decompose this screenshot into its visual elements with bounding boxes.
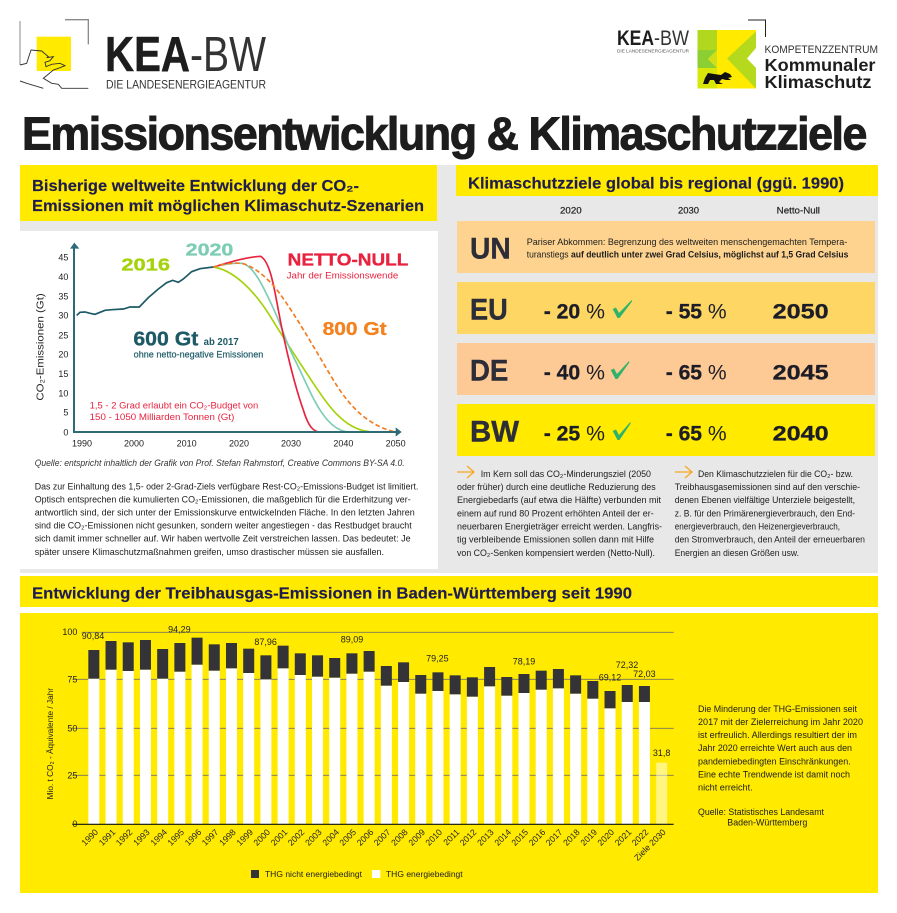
bar chart: THG emissions: 31,8 bbox=[653, 748, 670, 758]
panel: weltweite Entwicklung content bbox=[20, 231, 438, 569]
line chart: CO2 emissions scenarios: 40 bbox=[58, 272, 68, 282]
bar chart: THG emissions: 89,09 bbox=[341, 634, 363, 644]
icon: lion bbox=[703, 72, 732, 84]
line chart: CO2 emissions scenarios: 20 bbox=[58, 350, 68, 360]
row: UN bbox=[457, 221, 875, 273]
line chart: CO2 emissions scenarios: 1,5 - 2 Grad erlaubt ein CO₂-Budget von bbox=[90, 401, 258, 411]
line chart: CO2 emissions scenarios: ab 2017 bbox=[204, 337, 239, 348]
logo: KEA-BW bbox=[20, 20, 267, 92]
logo: KEA-BW: DIE LANDESENERGIEAGENTUR bbox=[106, 80, 266, 92]
bar chart: THG emissions: 2021 bbox=[613, 827, 634, 848]
title: Emissionsentwicklung & Klimaschutzziele bbox=[22, 108, 867, 160]
table: column headers: 2020 bbox=[560, 206, 582, 216]
text block: Minderung commentary: pandemiebedingten Einschränkungen. bbox=[698, 757, 851, 768]
bar chart: THG emissions: 1995 bbox=[165, 827, 186, 848]
bar chart: THG emissions: 2002 bbox=[286, 827, 307, 848]
row: EU: EU bbox=[470, 293, 508, 326]
row: EU: - 20 % bbox=[544, 299, 605, 323]
bar chart: THG emissions: 2018 bbox=[561, 827, 582, 848]
line chart: CO2 emissions scenarios: 600 Gt bbox=[133, 329, 199, 351]
bar chart: THG emissions: 2019 bbox=[578, 827, 599, 848]
bar chart: THG emissions: 94,29 bbox=[168, 624, 191, 634]
bar chart: THG emissions: 2015 bbox=[509, 827, 530, 848]
logo: Kompetenzzentrum Kommunaler Klimaschutz: Kommunaler bbox=[764, 55, 876, 75]
bar chart: THG emissions: 2022 bbox=[630, 827, 651, 848]
text block: Minderung commentary bbox=[698, 704, 863, 794]
bar chart: THG emissions: 2014 bbox=[492, 827, 513, 848]
line chart: CO2 emissions scenarios: ohne netto-negative Emissionen bbox=[134, 350, 263, 360]
line chart: CO2 emissions scenarios: NETTO-NULL bbox=[288, 250, 408, 270]
line chart: CO2 emissions scenarios: 35 bbox=[58, 291, 68, 301]
row: EU bbox=[457, 282, 875, 334]
row: DE: 2045 bbox=[773, 360, 829, 384]
logo: Kompetenzzentrum Kommunaler Klimaschutz: KEA bbox=[617, 27, 654, 50]
bar chart: THG emissions: 25 bbox=[67, 770, 77, 780]
line chart: CO2 emissions scenarios: 30 bbox=[58, 311, 68, 321]
line chart: CO2 emissions scenarios: 5 bbox=[63, 408, 68, 418]
icon: check mark bbox=[613, 422, 631, 440]
bar chart: THG emissions: 2011 bbox=[441, 827, 462, 847]
icon: check mark bbox=[613, 300, 632, 318]
text block: Minderung commentary: Die Minderung der THG-Emissionen seit bbox=[698, 704, 857, 715]
text block: Minderung commentary: Jahr 2020 erreichte Wert auch aus den bbox=[698, 743, 852, 754]
table: column headers: Netto-Null bbox=[777, 206, 820, 216]
bar chart: THG emissions: 1991 bbox=[97, 827, 118, 848]
text block: CO2-Minderungsziel: von CO₂-Senken kompensiert werden (Netto-Null). bbox=[457, 548, 655, 559]
text block: CO2-Minderungsziel: Energiebedarfs (auf etwa die Hälfte) verbunden mit bbox=[457, 495, 661, 506]
bar chart: THG emissions: 1997 bbox=[200, 827, 221, 848]
bar chart: THG emissions: 1999 bbox=[234, 827, 255, 848]
bar chart: THG emissions: 2020 bbox=[595, 827, 616, 848]
bar chart: THG emissions: 2003 bbox=[303, 827, 324, 848]
row: BW: BW bbox=[470, 416, 520, 449]
row: DE: DE bbox=[470, 355, 508, 388]
bar chart: THG emissions: Ziele 2030 bbox=[632, 827, 668, 863]
row: UN: turanstiegs auf deutlich unter zwei Grad Celsius, möglichst auf 1,5 Grad Celsius bbox=[527, 250, 848, 261]
line chart: CO2 emissions scenarios bbox=[35, 240, 408, 448]
bar chart: THG emissions: 2016 bbox=[527, 827, 548, 848]
panel: Klimaschutzziele heading: Klimaschutzziele global bis regional (ggü. 1990) bbox=[468, 176, 844, 192]
source note: Quelle: entspricht inhaltlich der Grafik von Prof. Stefan Rahmstorf, Creative Commons BY-SA 4.0. bbox=[35, 458, 405, 468]
source note: Quelle: Statistisches Landesamt bbox=[698, 807, 824, 818]
panel: Baden-Württemberg heading bbox=[20, 576, 878, 607]
text block: budget: Optisch entsprechen die kumulierten CO₂-Emissionen, die maßgeblich für die Erderhitzung ver- bbox=[35, 494, 411, 506]
source note bbox=[698, 807, 824, 829]
bar chart: THG emissions: 2010 bbox=[423, 827, 444, 848]
panel: weltweite Entwicklung heading: Emissionen mit möglichen Klimaschutz-Szenarien bbox=[32, 198, 424, 215]
text block: Unterziele: Energien an diesen Größen usw. bbox=[675, 548, 799, 559]
text block: CO2-Minderungsziel: oder früher) durch eine deutliche Reduzierung des bbox=[457, 482, 656, 493]
logo: Kompetenzzentrum Kommunaler Klimaschutz bbox=[617, 20, 878, 92]
bar chart: THG emissions: 90,84 bbox=[82, 631, 104, 641]
arrow bbox=[457, 466, 474, 478]
bar chart: THG emissions: 2007 bbox=[372, 827, 393, 848]
panel: weltweite Entwicklung heading bbox=[20, 165, 437, 221]
row: BW bbox=[457, 404, 875, 456]
table: column headers bbox=[560, 206, 820, 216]
logo: Kompetenzzentrum Kommunaler Klimaschutz: DIE LANDESENERGIEAGENTUR bbox=[617, 48, 690, 54]
line chart: CO2 emissions scenarios: 2016 bbox=[121, 255, 170, 275]
legend: THG energiebedingt bbox=[386, 869, 463, 879]
line chart: CO2 emissions scenarios: 2040 bbox=[333, 438, 353, 448]
bar chart: THG emissions: 2009 bbox=[406, 827, 427, 848]
bar chart: THG emissions: 1994 bbox=[148, 827, 169, 848]
bar chart: THG emissions: Mio. t CO₂ - Äquivalente / Jahr bbox=[45, 688, 55, 799]
text block: Unterziele: energieverbrauch, den Heizenergieverbrauch, bbox=[675, 522, 840, 532]
row: EU: - 55 % bbox=[666, 299, 727, 323]
row: BW: - 65 % bbox=[666, 422, 727, 446]
text block: CO2-Minderungsziel: einem auf rund 80 Prozent erhöhten Anteil der er- bbox=[457, 508, 654, 520]
line chart: CO2 emissions scenarios: 150 - 1050 Milliarden Tonnen (Gt) bbox=[90, 412, 234, 422]
text block: Minderung commentary: 2017 mit der Zielerreichung im Jahr 2020 bbox=[698, 717, 863, 728]
text block: Unterziele: z. B. für den Primärenergieverbrauch, den End- bbox=[675, 508, 855, 520]
bar chart: THG emissions: 100 bbox=[62, 627, 77, 637]
row: DE: - 65 % bbox=[666, 360, 727, 384]
text block: budget: sind die CO₂-Emissionen nicht gesunken, sondern weiter angestiegen - das Restbudget braucht bbox=[35, 520, 412, 532]
line chart: CO2 emissions scenarios: 2020 bbox=[186, 240, 233, 260]
text block: CO2-Minderungsziel: Im Kern soll das CO₂-Minderungsziel (2050 bbox=[481, 469, 651, 480]
text block: Unterziele: den Stromverbrauch, den Anteil der erneuerbaren bbox=[675, 534, 865, 546]
row: DE: - 40 % bbox=[544, 360, 605, 384]
text block: budget: sich damit immer schneller auf. Wir haben wertvolle Zeit verstreichen lassen. Das bedeutet: Je bbox=[35, 534, 411, 544]
line chart: CO2 emissions scenarios: 2030 bbox=[281, 438, 301, 448]
text block: CO2-Minderungsziel: neuerbaren Energieträger erreicht werden. Langfris- bbox=[457, 522, 662, 532]
row: BW: - 25 % bbox=[544, 422, 605, 446]
bar chart: THG emissions bbox=[45, 624, 674, 879]
bar chart: THG emissions: 79,25 bbox=[426, 653, 449, 663]
legend bbox=[251, 869, 463, 879]
bar chart: THG emissions: 2000 bbox=[251, 827, 272, 848]
line chart: CO2 emissions scenarios: 1990 bbox=[72, 438, 92, 448]
text block: Unterziele: Den Klimaschutzzielen für die CO₂- bzw. bbox=[698, 469, 853, 480]
bar chart: THG emissions: 2004 bbox=[320, 827, 341, 848]
bar chart: THG emissions: 2013 bbox=[475, 827, 496, 848]
bar chart: THG emissions: 0 bbox=[72, 819, 77, 829]
text block: CO2-Minderungsziel bbox=[457, 466, 662, 559]
arrow bbox=[675, 466, 692, 478]
row: EU: 2050 bbox=[773, 299, 829, 323]
line chart: CO2 emissions scenarios: 2010 bbox=[177, 438, 197, 448]
bar chart: THG emissions: 2012 bbox=[458, 827, 479, 848]
text block: budget: Das zur Einhaltung des 1,5- oder 2-Grad-Ziels verfügbare Rest-CO₂-Emissions-Budget ist limitiert. bbox=[35, 482, 418, 492]
line chart: CO2 emissions scenarios: 2050 bbox=[386, 438, 406, 448]
text block: Unterziele: Treibhausgasemissionen sind auf den verschie- bbox=[675, 482, 860, 493]
line chart: CO2 emissions scenarios: 25 bbox=[58, 330, 68, 340]
text block: Minderung commentary: nicht erreicht. bbox=[698, 783, 753, 794]
bar chart: THG emissions: 1998 bbox=[217, 827, 238, 848]
text block: Minderung commentary: Eine echte Trendwende ist damit noch bbox=[698, 770, 850, 781]
text block: budget: antwortlich sind, der sich unter der Emissionskurve entwickelnden Fläche. In den letzten Jahren bbox=[35, 508, 415, 518]
bar chart: THG emissions: 2005 bbox=[337, 827, 358, 848]
bar chart: THG emissions: 78,19 bbox=[513, 657, 535, 667]
line chart: CO2 emissions scenarios: 2000 bbox=[124, 438, 144, 448]
source note: Baden-Württemberg bbox=[727, 818, 807, 829]
line chart: CO2 emissions scenarios: 15 bbox=[58, 369, 68, 379]
bar chart: THG emissions: 69,12 bbox=[599, 673, 621, 683]
bar chart: THG emissions: 87,96 bbox=[254, 637, 277, 647]
logo: Kompetenzzentrum Kommunaler Klimaschutz: -BW bbox=[654, 27, 689, 50]
line chart: CO2 emissions scenarios: 2020 bbox=[229, 438, 249, 448]
logo: Kompetenzzentrum Kommunaler Klimaschutz: Klimaschutz bbox=[764, 72, 872, 92]
row: UN: UN bbox=[470, 232, 511, 265]
bar chart: THG emissions: 50 bbox=[67, 723, 77, 733]
line chart: CO2 emissions scenarios: CO₂-Emissionen (Gt) bbox=[35, 293, 46, 401]
panel: Baden-Württemberg chart area bbox=[20, 613, 878, 893]
bar chart: THG emissions: 1996 bbox=[183, 827, 204, 848]
line chart: CO2 emissions scenarios: 45 bbox=[58, 253, 68, 263]
text block: Minderung commentary: ist erfreulich. Allerdings resultiert der im bbox=[698, 730, 857, 741]
table: column headers: 2030 bbox=[678, 206, 699, 216]
text block: budget bbox=[35, 482, 418, 558]
text block: CO2-Minderungsziel: tig verbleibende Emissionen sollen dann mit Hilfe bbox=[457, 534, 654, 546]
line chart: CO2 emissions scenarios: Jahr der Emissionswende bbox=[287, 270, 398, 280]
bar chart: THG emissions: 72,32 bbox=[616, 660, 638, 670]
bar chart: THG emissions: 1992 bbox=[114, 827, 135, 848]
line chart: CO2 emissions scenarios: 10 bbox=[58, 388, 68, 398]
panel: Klimaschutzziele heading bbox=[456, 165, 878, 196]
panel: Baden-Württemberg heading: Entwicklung der Treibhausgas-Emissionen in Baden-Württemberg seit 1990 bbox=[32, 586, 632, 602]
bar chart: THG emissions: 2006 bbox=[355, 827, 376, 848]
bar chart: THG emissions: 1993 bbox=[131, 827, 152, 848]
text block: budget: später unsere Klimaschutzmaßnahmen greifen, umso drastischer müssen sie ausfallen. bbox=[35, 547, 384, 558]
row: BW: 2040 bbox=[773, 422, 829, 446]
row: UN: Pariser Abkommen: Begrenzung des weltweiten menschengemachten Tempera- bbox=[527, 237, 847, 248]
text block: Unterziele bbox=[675, 466, 865, 559]
bar chart: THG emissions: 75 bbox=[67, 674, 77, 684]
logo: KEA-BW: KEA bbox=[105, 28, 190, 82]
row: DE bbox=[457, 343, 875, 395]
bar chart: THG emissions: 72,03 bbox=[633, 669, 656, 679]
bar chart: THG emissions: 2008 bbox=[389, 827, 410, 848]
line chart: CO2 emissions scenarios: 800 Gt bbox=[323, 318, 387, 339]
text block: Unterziele: denen Ebenen vielfältige Unterziele beigestellt, bbox=[675, 495, 855, 506]
logo: Kompetenzzentrum Kommunaler Klimaschutz: KOMPETENZZENTRUM bbox=[764, 44, 878, 56]
icon: check mark bbox=[611, 361, 629, 379]
line chart: CO2 emissions scenarios: 0 bbox=[63, 427, 68, 437]
legend: THG nicht energiebedingt bbox=[265, 869, 363, 879]
bar chart: THG emissions: 1990 bbox=[79, 827, 100, 848]
bar chart: THG emissions: 2017 bbox=[544, 827, 565, 848]
logo: KEA-BW: -BW bbox=[190, 28, 267, 82]
panel: weltweite Entwicklung heading: Bisherige weltweite Entwicklung der CO₂- bbox=[32, 178, 359, 195]
bar chart: THG emissions: 2001 bbox=[269, 827, 290, 848]
